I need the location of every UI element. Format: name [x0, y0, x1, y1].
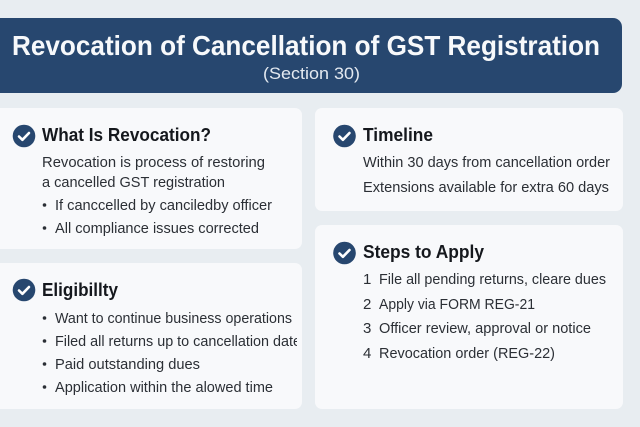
icon: check badge — [333, 125, 356, 147]
icon: check badge — [333, 242, 356, 264]
heading: timeline: Timeline — [363, 124, 433, 145]
subtitle: (Section 30) — [263, 64, 360, 83]
text block: timeline details: Within 30 days from cancellation order — [363, 154, 610, 171]
heading: steps to apply: Steps to Apply — [363, 241, 485, 262]
panel: timeline — [315, 108, 623, 211]
bullet list: eligibility: Application within the alowed time — [55, 379, 273, 396]
bullet list: eligibility — [43, 310, 301, 396]
icon: check badge — [13, 125, 35, 147]
panel: what is revocation — [0, 108, 302, 249]
bullet list: conditions: All compliance issues corrected — [55, 220, 259, 237]
numbered list: steps: 3 — [363, 320, 371, 337]
numbered list: steps: Officer review, approval or notice — [379, 320, 591, 337]
panel: steps to apply — [315, 225, 623, 409]
text block: definition: Revocation is process of restoring — [42, 154, 265, 171]
bullet list: conditions — [43, 197, 272, 237]
numbered list: steps: 4 — [363, 345, 371, 362]
title: Revocation of Cancellation of GST Registration — [12, 30, 600, 61]
text block: definition — [42, 154, 265, 191]
numbered list: steps: 2 — [363, 296, 371, 313]
numbered list: steps — [363, 271, 606, 362]
bullet list: eligibility: Paid outstanding dues — [55, 356, 200, 373]
text block: timeline details — [363, 154, 610, 196]
title banner — [0, 18, 622, 93]
panel: eligibility — [0, 263, 302, 409]
bullet list: conditions: If canccelled by canciledby officer — [55, 197, 272, 214]
heading: what is revocation: What Is Revocation? — [42, 124, 211, 145]
numbered list: steps: File all pending returns, cleare dues — [379, 271, 606, 288]
heading: eligibility: Eligibillty — [42, 279, 119, 300]
bullet list: eligibility: Filed all returns up to cancellation date — [55, 333, 301, 350]
bullet list: eligibility: Want to continue business operations — [55, 310, 292, 327]
numbered list: steps: 1 — [363, 271, 371, 288]
numbered list: steps: Revocation order (REG-22) — [379, 345, 555, 362]
text block: definition: a cancelled GST registration — [42, 174, 225, 191]
text block: timeline details: Extensions available for extra 60 days — [363, 179, 609, 196]
icon: check badge — [13, 279, 35, 301]
numbered list: steps: Apply via FORM REG-21 — [379, 296, 535, 313]
